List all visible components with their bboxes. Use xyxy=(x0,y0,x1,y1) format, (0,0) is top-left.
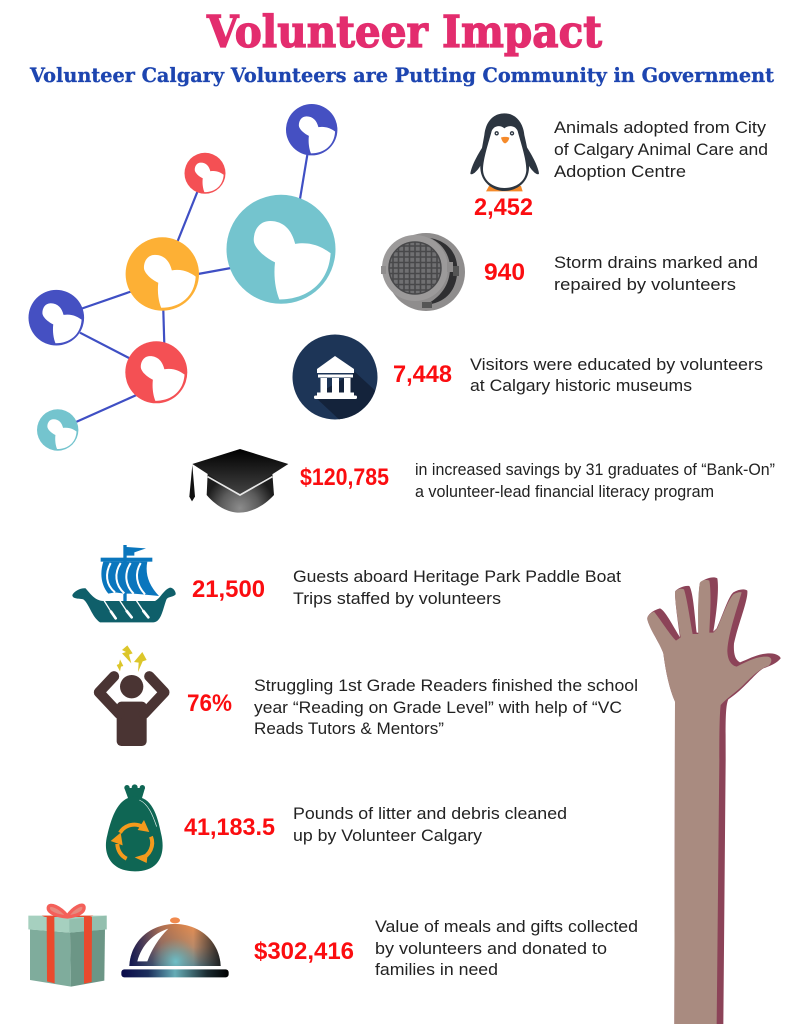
icon: penguin xyxy=(470,113,539,191)
node: orange xyxy=(126,237,199,311)
stat: storm drains: repaired by volunteers xyxy=(554,275,736,294)
icon: stressed reader xyxy=(99,645,164,746)
people network diagram xyxy=(28,104,337,451)
node: top blue xyxy=(286,104,337,155)
stat: meals and gifts: families in need xyxy=(375,960,498,979)
node: large teal xyxy=(226,195,336,304)
stat: reading level: Struggling 1st Grade Readers finished the school xyxy=(254,676,638,695)
node: small teal xyxy=(37,409,78,451)
title: Volunteer Impact xyxy=(206,7,603,58)
stat: litter: 41,183.5 xyxy=(184,814,275,841)
icon: recycling litter bag xyxy=(106,784,163,871)
stat: boat guests: 21,500 xyxy=(192,576,265,603)
stat: savings xyxy=(300,460,775,501)
stat: reading level: 76% xyxy=(187,690,232,717)
icon: food cloche xyxy=(121,917,229,977)
stat: storm drains: Storm drains marked and xyxy=(554,253,758,272)
node: lower red xyxy=(125,341,187,403)
stat: meals and gifts: $302,416 xyxy=(254,938,354,965)
subtitle: Volunteer Calgary Volunteers are Putting Community in Government xyxy=(29,63,775,87)
stat: animals adopted: Adoption Centre xyxy=(554,162,686,181)
stat: meals and gifts xyxy=(254,917,638,979)
icon: graduation cap xyxy=(189,449,288,513)
icon: museum badge xyxy=(292,334,380,425)
stat: museum visitors: at Calgary historic museums xyxy=(470,376,692,395)
stat: animals adopted xyxy=(474,118,768,221)
stat: museum visitors xyxy=(393,355,763,395)
stat: reading level xyxy=(187,676,638,738)
illustration: raised hand xyxy=(647,577,781,1024)
stat: reading level: Reads Tutors & Mentors” xyxy=(254,719,444,738)
stat: museum visitors: Visitors were educated by volunteers xyxy=(470,355,763,374)
icon: viking paddle boat xyxy=(72,545,176,622)
stat: savings: $120,785 xyxy=(300,464,389,491)
stat: litter xyxy=(184,804,567,845)
stat: savings: in increased savings by 31 graduates of “Bank-On” xyxy=(415,460,775,479)
stat: storm drains xyxy=(484,253,758,294)
stat: meals and gifts: Value of meals and gifts collected xyxy=(375,917,638,936)
stat: animals adopted: of Calgary Animal Care and xyxy=(554,140,768,159)
stat: litter: Pounds of litter and debris cleaned xyxy=(293,804,567,823)
stat: litter: up by Volunteer Calgary xyxy=(293,826,483,845)
icon: storm drain xyxy=(381,233,465,311)
stat: boat guests: Guests aboard Heritage Park Paddle Boat xyxy=(293,567,621,586)
stat: museum visitors: 7,448 xyxy=(393,361,452,388)
stat: storm drains: 940 xyxy=(484,259,525,286)
stat: boat guests: Trips staffed by volunteers xyxy=(293,589,501,608)
stat: savings: a volunteer-lead financial literacy program xyxy=(415,482,714,501)
node: small red xyxy=(184,153,226,194)
stat: animals adopted: Animals adopted from City xyxy=(554,118,767,137)
stat: reading level: year “Reading on Grade Level” with help of “VC xyxy=(254,698,622,717)
stat: boat guests xyxy=(192,567,621,608)
icon: gift box xyxy=(28,905,107,987)
node: left blue xyxy=(28,290,84,346)
stat: animals adopted: 2,452 xyxy=(474,194,533,221)
stat: meals and gifts: by volunteers and donated to xyxy=(375,939,607,958)
